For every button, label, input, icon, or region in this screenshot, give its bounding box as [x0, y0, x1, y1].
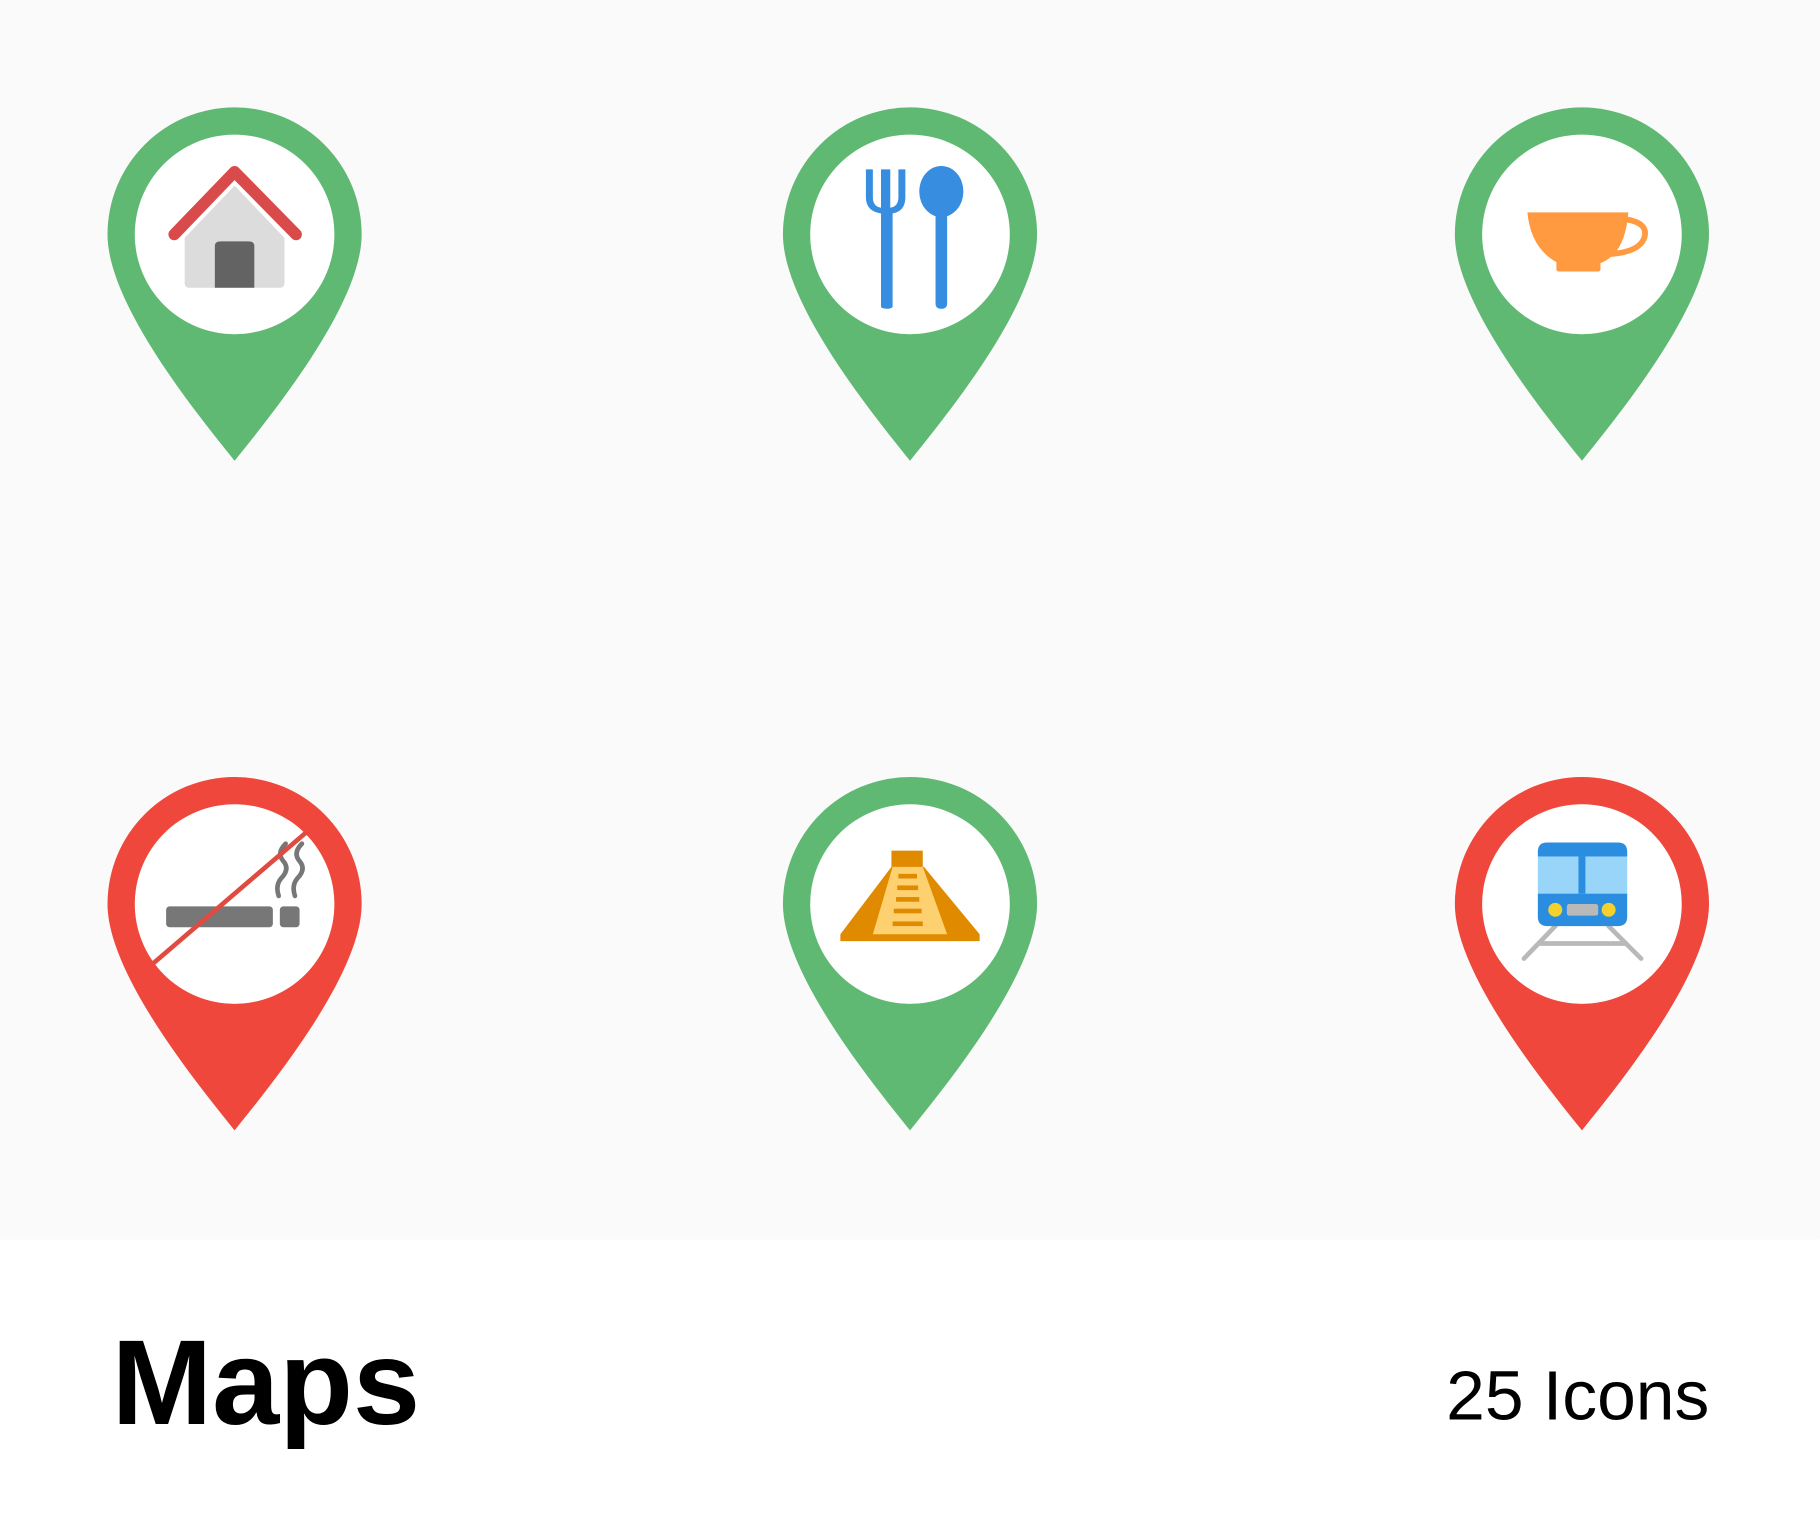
icon: no smoking: [153, 832, 307, 963]
icon: fork and spoon: [866, 166, 963, 309]
title: Maps: [112, 1315, 420, 1450]
icon count: 25 Icons: [1446, 1356, 1709, 1434]
pin: train: [1455, 777, 1709, 1130]
pin: home: [108, 107, 362, 461]
pin: restaurant: [783, 107, 1037, 461]
icon: train: [1524, 843, 1641, 959]
pin: pyramid: [783, 777, 1037, 1130]
icon: pyramid: [840, 851, 980, 941]
icon: cup: [1527, 212, 1645, 272]
pin: no smoking: [108, 777, 362, 1130]
icon: house: [174, 172, 296, 288]
pin: cafe: [1455, 107, 1709, 461]
